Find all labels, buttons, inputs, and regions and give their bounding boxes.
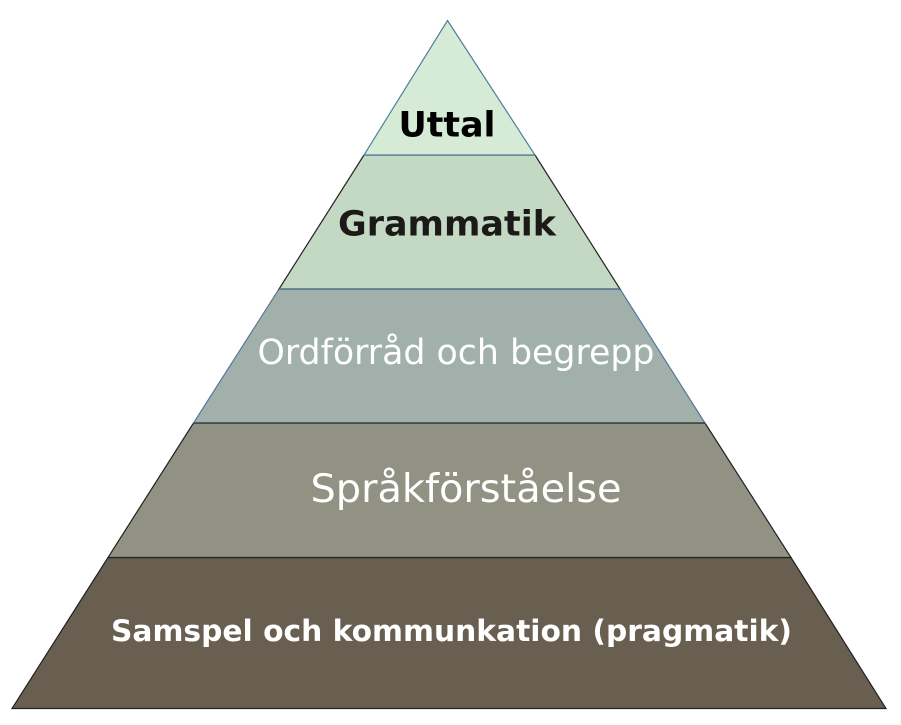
level 1: Uttal [364,20,535,155]
level 5: Samspel och kommunkation: Samspel och kommunkation (pragmatik) [111,614,792,648]
level 4: Språkförståelse: Språkförståelse [310,467,622,512]
level 4: Språkförståelse [108,423,791,558]
level 5: Samspel och kommunkation [12,558,886,708]
level 2: Grammatik: Grammatik [338,204,557,244]
level 2: Grammatik [279,155,620,289]
level 3: Ordförråd och begrepp: Ordförråd och begrepp [258,333,654,373]
level 1: Uttal: Uttal [398,106,496,146]
level 3: Ordförråd och begrepp [194,289,705,423]
